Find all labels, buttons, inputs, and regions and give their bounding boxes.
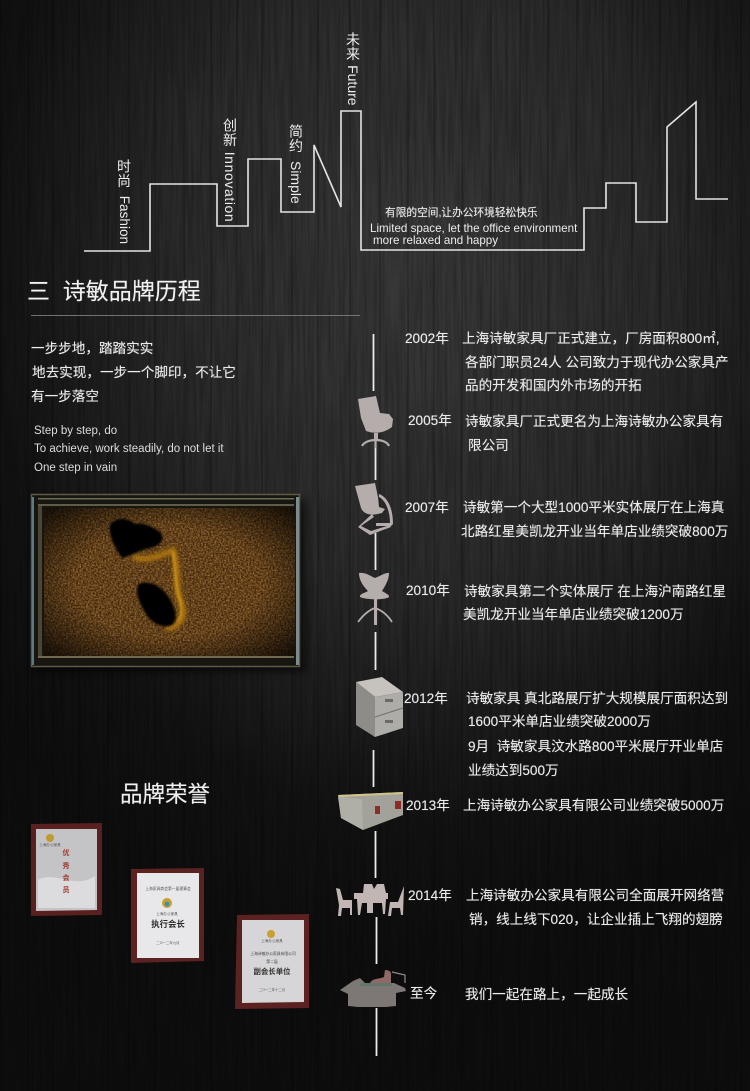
heading: brand honours: 品牌荣誉 — [120, 782, 210, 807]
timeline entry 2014: 上海诗敏办公家具有限公司全面展开网络营 — [466, 888, 724, 903]
icon: cantilever chair — [355, 483, 393, 535]
intro text chinese: 一步步地，踏踏实实 — [31, 341, 153, 356]
plaque: vice president unit: 第二届 — [266, 959, 278, 964]
timeline entry 2012: 2012年 — [404, 691, 448, 706]
timeline entry 2010: 2010年 — [406, 583, 450, 598]
timeline entry 2007 — [405, 500, 728, 539]
plaque: vice president unit: 上海办公家具 — [261, 938, 283, 943]
timeline entry 2002: 各部门职员24人 公司致力于现代办公家具产 — [465, 355, 729, 370]
title rule — [31, 315, 360, 316]
vertical label: simple: 简约 Simple — [288, 124, 304, 204]
icon: office desk — [340, 970, 406, 1007]
timeline entry 2012: 1600平米单店业绩突破2000万 — [468, 714, 651, 729]
timeline entry 2005: 限公司 — [468, 438, 509, 453]
plaque: excellent member: 上海办公家具 — [39, 842, 61, 847]
intro text english — [34, 425, 224, 474]
timeline entry 2005 — [408, 413, 723, 453]
vertical label: fashion: 时尚 Fashion — [116, 159, 132, 244]
timeline entry 2005: 诗敏家具厂正式更名为上海诗敏办公家具有 — [465, 414, 723, 429]
timeline entry 2012 — [404, 691, 728, 778]
icon: office chair — [358, 396, 393, 448]
skyline caption: 有限的空间,让办公环境轻松快乐 — [385, 207, 538, 219]
timeline entry 2007: 2007年 — [405, 500, 449, 515]
intro text english: One step in vain — [34, 462, 117, 474]
intro text chinese: 地去实现，一步一个脚印，不让它 — [32, 365, 236, 380]
framed footprint photo — [30, 494, 308, 672]
plaque: vice president unit — [235, 914, 309, 1009]
section title: 三 诗敏品牌历程 — [27, 278, 201, 304]
timeline entry 2014: 销，线上线下020，让企业插上飞翔的翅膀 — [469, 912, 723, 927]
timeline entry 2010 — [406, 583, 726, 622]
timeline entry 2007: 北路红星美凯龙开业当年单店业绩突破800万 — [461, 524, 728, 539]
plaque: vice president unit: 二O一二年十二月 — [259, 987, 285, 992]
icon: filing cabinet — [356, 677, 403, 737]
intro text english: Step by step, do — [34, 425, 117, 437]
plaque: executive president: 上海办公家具 — [156, 911, 178, 916]
timeline entry 2013: 上海诗敏办公家具有限公司业绩突破5000万 — [463, 798, 724, 813]
icon: dining set — [336, 884, 404, 916]
plaque: executive president — [131, 868, 204, 963]
timeline entry 2007: 诗敏第一个大型1000平米实体展厅在上海真 — [463, 500, 724, 515]
timeline entry 2010: 美凯龙开业当年单店业绩突破1200万 — [463, 607, 684, 622]
timeline entry 2002: 上海诗敏家具厂正式建立，厂房面积800㎡, — [462, 331, 720, 346]
timeline entry 2002: 品的开发和国内外市场的开拓 — [465, 378, 642, 393]
plaque: excellent member: 秀 — [62, 861, 70, 870]
plaque: executive president: 上海家具商会第一届理事会 — [145, 886, 191, 891]
plaque: vice president unit: 副会长单位 — [254, 967, 291, 976]
intro text chinese — [31, 340, 236, 404]
vertical label: future: 未来 Future — [345, 32, 361, 106]
skyline caption: more relaxed and happy — [373, 234, 498, 247]
timeline entry 2010: 诗敏家具第二个实体展厅 在上海沪南路红星 — [464, 584, 726, 599]
icon: swivel chair — [358, 573, 392, 625]
intro text chinese: 有一步落空 — [31, 389, 99, 404]
plaque: executive president: 二O一二年九月 — [157, 940, 179, 945]
plaque: excellent member — [31, 823, 102, 916]
timeline entry 2005: 2005年 — [408, 413, 452, 428]
plaque: excellent member: 优 — [62, 848, 70, 857]
timeline entry 2012: 9月 诗敏家具汶水路800平米展厅开业单店 — [468, 739, 723, 754]
footprints — [110, 519, 175, 626]
timeline entry 2012: 诗敏家具 真北路展厅扩大规模展厅面积达到 — [466, 691, 728, 706]
timeline entry 2014 — [408, 888, 724, 927]
timeline entry 2012: 业绩达到500万 — [468, 763, 559, 778]
plaque: excellent member: 员 — [62, 886, 70, 894]
footprint glow — [133, 550, 183, 628]
plaque: vice president unit: 上海诗敏办公家具有限公司 — [250, 951, 296, 956]
icon: storage unit — [338, 792, 403, 830]
timeline entry 2002 — [405, 330, 729, 393]
timeline entry present: 至今 — [410, 986, 437, 1001]
intro text english: To achieve, work steadily, do not let it — [34, 443, 224, 455]
timeline entry 2014: 2014年 — [408, 888, 452, 903]
timeline entry 2013: 2013年 — [406, 798, 450, 813]
skyline caption: Limited space, let the office environment — [370, 222, 577, 235]
plaque: excellent member: 会 — [62, 873, 70, 882]
plaque: executive president: 执行会长 — [151, 919, 185, 929]
timeline entry 2002: 2002年 — [405, 331, 449, 346]
vertical label: innovation: 创新 Innovation — [222, 118, 238, 222]
timeline entry present: 我们一起在路上，一起成长 — [465, 987, 628, 1002]
skyline caption — [370, 206, 578, 247]
